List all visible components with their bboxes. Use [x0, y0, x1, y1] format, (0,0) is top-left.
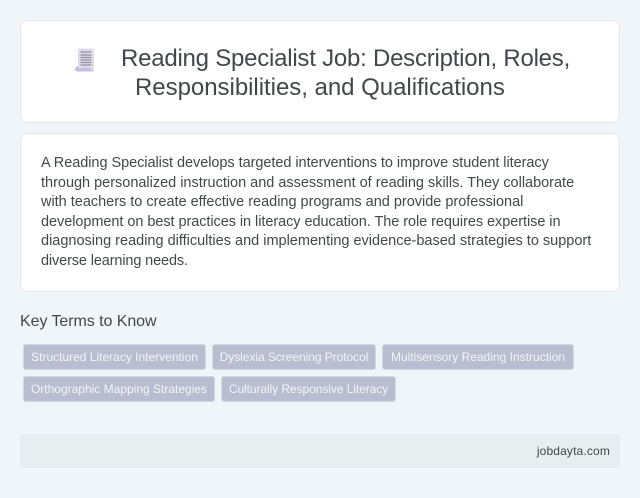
- footer source: jobdayta.com: [537, 444, 610, 458]
- panel: description: [20, 133, 620, 292]
- description text: [41, 155, 592, 268]
- title line 1: Reading Specialist Job: Description, Roles,: [121, 45, 570, 72]
- tag: Orthographic Mapping Strategies: [31, 382, 207, 396]
- tag: Multisensory Reading Instruction: [391, 350, 565, 364]
- description text: diagnosing reading difficulties and implementing evidence-based strategies to support: [41, 233, 591, 249]
- description text: with teachers to create effective reading programs and provide professional: [41, 194, 523, 210]
- panel: title card: [20, 20, 620, 123]
- heading: key terms: Key Terms to Know: [20, 313, 157, 330]
- tags: key terms: [23, 344, 574, 402]
- description text: through personalized instruction and assessment of reading skills. They collaborate: [41, 174, 574, 190]
- tag: [23, 344, 206, 370]
- tag: [212, 344, 376, 370]
- tag: Culturally Responsive Literacy: [229, 382, 388, 396]
- title line 2: Responsibilities, and Qualifications: [135, 74, 505, 101]
- tag: [221, 376, 396, 402]
- description text: A Reading Specialist develops targeted interventions to improve student literacy: [41, 155, 549, 171]
- description text: development on best practices in literacy education. The role requires expertise in: [41, 214, 560, 230]
- tag: Structured Literacy Intervention: [31, 350, 198, 364]
- icon: document scroll: [75, 48, 94, 72]
- tag: Dyslexia Screening Protocol: [220, 350, 368, 364]
- description text: diverse learning needs.: [41, 252, 188, 268]
- footer bar: [20, 434, 620, 468]
- tag: [23, 376, 215, 402]
- tag: [382, 344, 574, 370]
